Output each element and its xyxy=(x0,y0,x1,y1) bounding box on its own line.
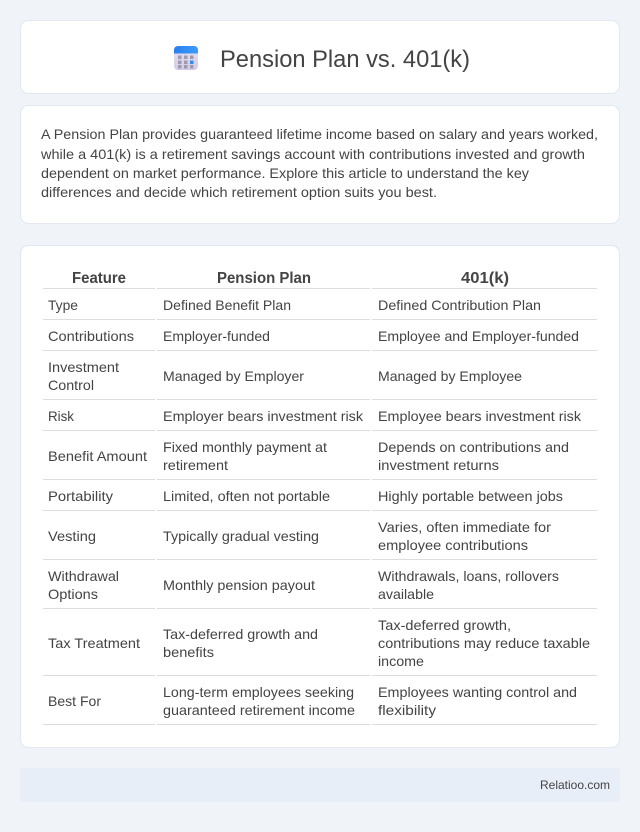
intro text: dependent on market performance. Explore this article to understand the key xyxy=(41,165,529,181)
row: withdrawal options: Options xyxy=(48,586,98,602)
row: tax treatment: benefits xyxy=(163,644,214,660)
row: best for xyxy=(48,684,577,718)
footer xyxy=(20,768,620,802)
row: risk xyxy=(48,408,582,424)
row: portability xyxy=(48,488,563,504)
row: investment control: Managed by Employee xyxy=(378,368,522,384)
row: investment control: Managed by Employer xyxy=(163,368,304,384)
title: Pension Plan vs. 401(k) xyxy=(220,46,470,73)
row: investment control: Control xyxy=(48,377,94,393)
row: withdrawal options xyxy=(48,568,559,602)
row: withdrawal options: Withdrawal xyxy=(48,568,119,584)
panel: introduction xyxy=(20,106,620,224)
row: benefit amount: retirement xyxy=(163,457,228,473)
row: contributions: Employer-funded xyxy=(163,328,270,344)
intro text: while a 401(k) is a retirement savings account with contributions invested and growth xyxy=(40,146,585,162)
row: portability: Limited, often not portable xyxy=(163,488,330,504)
row: best for: Best For xyxy=(48,693,101,709)
row: benefit amount: investment returns xyxy=(378,457,499,473)
table header: 401(k) xyxy=(461,270,509,287)
intro text xyxy=(40,126,598,200)
row: withdrawal options: Monthly pension payout xyxy=(163,577,315,593)
row: portability: Portability xyxy=(48,488,113,504)
row: contributions xyxy=(48,328,579,344)
row: tax treatment xyxy=(48,617,590,669)
row: vesting: Varies, often immediate for xyxy=(378,519,551,535)
row: benefit amount: Benefit Amount xyxy=(48,448,147,464)
row: investment control: Investment xyxy=(48,359,119,375)
row: best for: Employees wanting control and xyxy=(378,684,577,700)
intro text: A Pension Plan provides guaranteed lifetime income based on salary and years worked, xyxy=(41,126,598,142)
icon: calendar xyxy=(174,46,198,70)
row: vesting: Vesting xyxy=(48,528,96,544)
row: contributions: Employee and Employer-funded xyxy=(378,328,579,344)
row: best for: Long-term employees seeking xyxy=(163,684,354,700)
row: tax treatment: Tax-deferred growth and xyxy=(163,626,318,642)
row: tax treatment: Tax-deferred growth, xyxy=(378,617,511,633)
row: benefit amount: Fixed monthly payment at xyxy=(163,439,327,455)
row: risk: Employee bears investment risk xyxy=(378,408,582,424)
row: risk: Employer bears investment risk xyxy=(163,408,364,424)
row: contributions: Contributions xyxy=(48,328,134,344)
row: tax treatment: income xyxy=(378,653,424,669)
intro text: differences and decide which retirement option suits you best. xyxy=(41,184,437,200)
table header: Pension Plan xyxy=(217,270,311,287)
row: type: Type xyxy=(48,297,78,313)
row: benefit amount xyxy=(48,439,569,473)
row: withdrawal options: available xyxy=(378,586,434,602)
row: benefit amount: Depends on contributions and xyxy=(378,439,569,455)
row: best for: flexibility xyxy=(378,702,436,718)
row: investment control xyxy=(48,359,522,393)
row: type: Defined Contribution Plan xyxy=(378,297,541,313)
row: best for: guaranteed retirement income xyxy=(163,702,355,718)
row: risk: Risk xyxy=(48,408,75,424)
row: tax treatment: contributions may reduce taxable xyxy=(378,635,590,651)
row: type: Defined Benefit Plan xyxy=(163,297,291,313)
panel: comparison table xyxy=(20,246,620,748)
footer: Relatioo.com xyxy=(540,778,610,792)
row: portability: Highly portable between jobs xyxy=(378,488,563,504)
panel: title card xyxy=(20,20,620,94)
row: vesting xyxy=(48,519,551,553)
row: vesting: employee contributions xyxy=(378,537,528,553)
row: withdrawal options: Withdrawals, loans, rollovers xyxy=(378,568,559,584)
row: type xyxy=(48,297,541,313)
table header: Feature xyxy=(72,270,126,287)
table header xyxy=(72,270,509,287)
row: vesting: Typically gradual vesting xyxy=(163,528,319,544)
row: tax treatment: Tax Treatment xyxy=(48,635,140,651)
